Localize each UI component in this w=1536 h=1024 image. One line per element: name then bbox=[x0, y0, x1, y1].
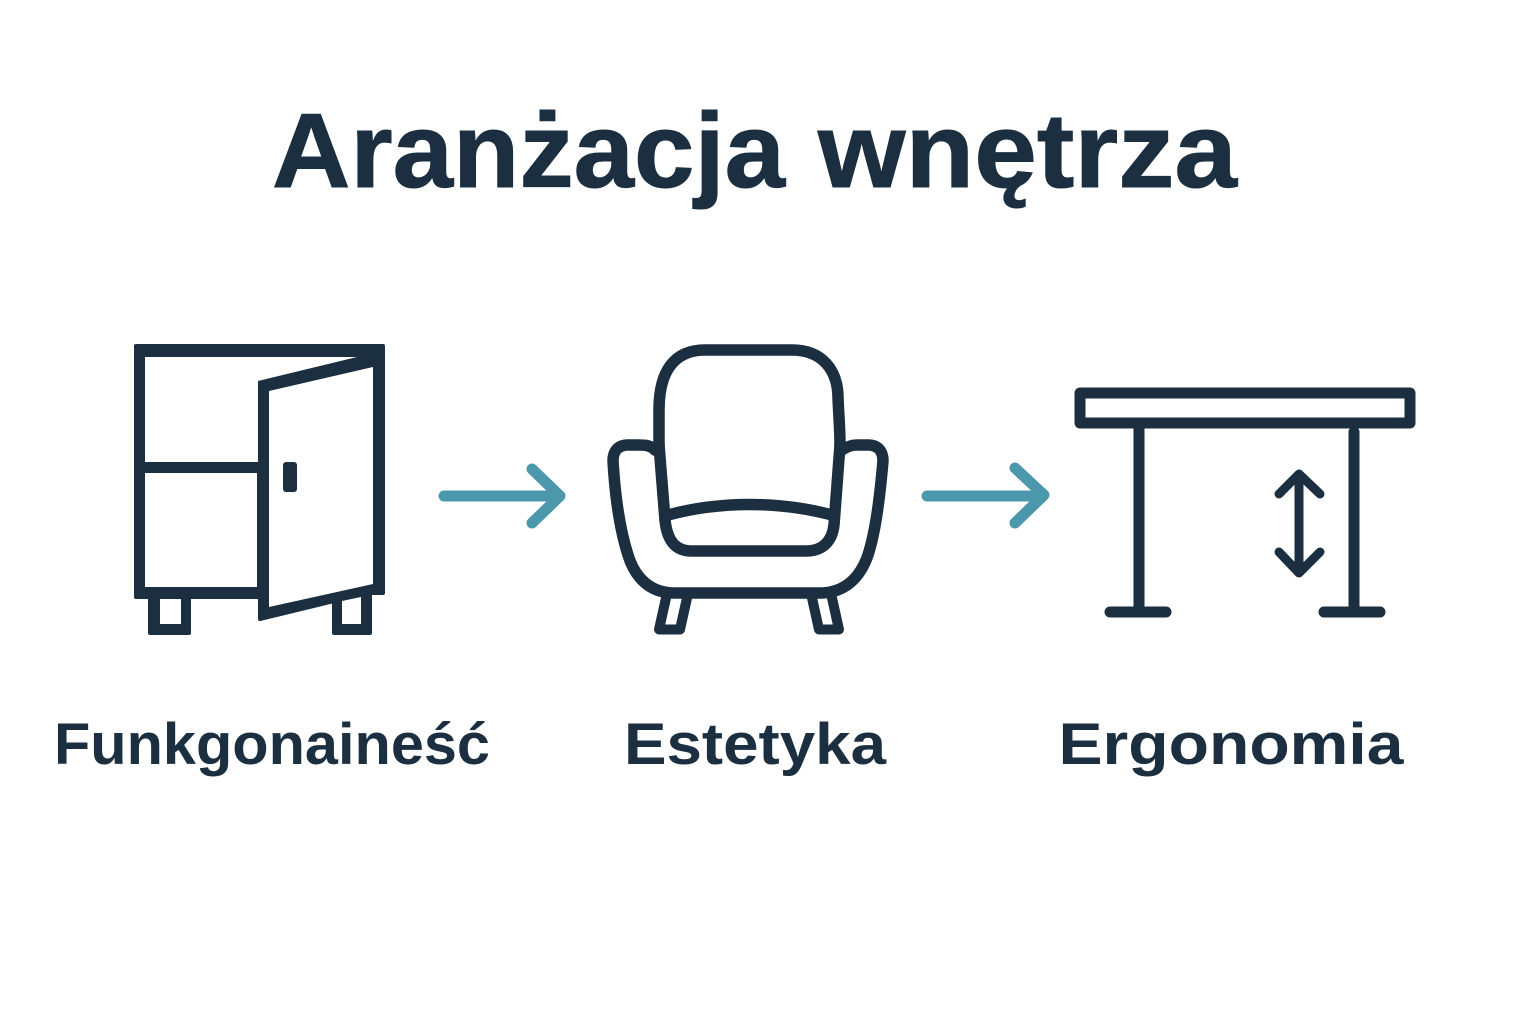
icon: armchair bbox=[613, 350, 883, 630]
arrow: second bbox=[927, 468, 1044, 523]
label: functionality: Funkgonaineść bbox=[54, 712, 490, 777]
icon: height-adjustable desk bbox=[1080, 393, 1410, 612]
icon: cabinet bbox=[136, 346, 383, 633]
label: ergonomics: Ergonomia bbox=[1058, 712, 1404, 777]
title bbox=[272, 92, 1238, 210]
label: aesthetics: Estetyka bbox=[624, 712, 887, 777]
title: wnętrza bbox=[817, 92, 1238, 210]
title: Aranżacja bbox=[272, 92, 786, 210]
icon: up-down arrow bbox=[1279, 474, 1320, 573]
arrow: first bbox=[444, 469, 560, 523]
